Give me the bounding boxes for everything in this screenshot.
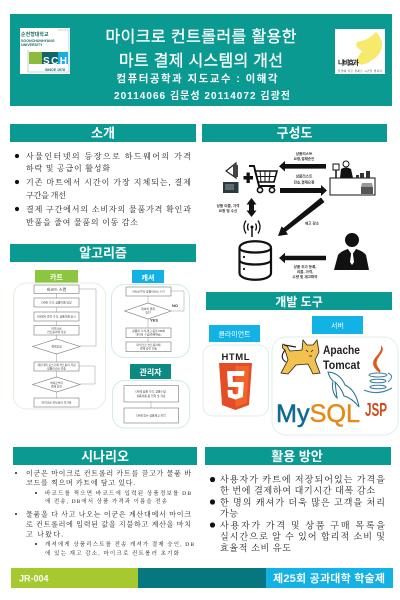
icon: wireless bbox=[244, 220, 260, 237]
cart flowchart: DB에 가격, 상품이름 요청 bbox=[41, 300, 72, 304]
header banner bbox=[10, 14, 392, 106]
cart flowchart: 캐셔로부터 bbox=[50, 381, 63, 385]
cashier flowchart: 상품의 가격,재고 등을 DB에 bbox=[132, 329, 165, 333]
server panel: 서버 bbox=[331, 321, 344, 330]
icon: HTML5: HTML bbox=[222, 352, 250, 363]
icon: java cup bbox=[364, 345, 392, 393]
label: stock decrease: 재고 감소 bbox=[305, 220, 320, 226]
section heading: intro: 소개 bbox=[91, 126, 115, 140]
label: manager input: 이름, 가격, bbox=[297, 269, 313, 274]
scenario text: 고 나왔다. bbox=[26, 530, 63, 538]
manager flowchart: DB에 있는 상품재고 파악 bbox=[136, 414, 166, 418]
section heading: algorithm: 알고리즘 bbox=[79, 246, 127, 260]
server panel bbox=[272, 316, 398, 435]
cashier flowchart: YES bbox=[150, 318, 158, 322]
scenario text: 에 있는 재고 감소, 마이크로 컨트롤러 초기화 bbox=[45, 549, 180, 557]
header banner: 마트 결제 시스템의 개선 bbox=[119, 52, 283, 70]
icon: cart sensors bbox=[223, 163, 238, 193]
cashier flowchart: 카트로부터 상품리스트 수신 bbox=[132, 290, 165, 294]
intro text bbox=[15, 151, 191, 227]
cashier flowchart: NO bbox=[172, 303, 178, 308]
butterfly logo: 한번에 작은 결제로 시간을 줄이다 bbox=[338, 69, 383, 73]
university logo: SOONCHUNHYANG bbox=[21, 39, 55, 43]
section heading: algorithm bbox=[10, 244, 196, 262]
cart flowchart: 계산대의 포스기에 컨트롤러 저장 bbox=[37, 363, 76, 367]
arrow: request list to cart bbox=[279, 161, 326, 172]
section heading: intro bbox=[10, 124, 196, 142]
arrow: cashier to database bbox=[278, 198, 324, 236]
label: manager input: 수량 및 재고파악 bbox=[292, 274, 318, 279]
icon: dolphin bbox=[328, 372, 359, 407]
cart flowchart: 상품리스트 전송 bbox=[47, 366, 66, 370]
cart flowchart: 카트 bbox=[50, 272, 63, 282]
intro text: 하락 및 공급이 활성화 bbox=[26, 163, 110, 173]
applications text: 한 명의 캐셔가 더욱 많은 고객을 처리 bbox=[220, 496, 385, 508]
section heading: architecture bbox=[202, 124, 387, 142]
university logo: 순천향대학교 bbox=[21, 31, 49, 38]
section heading: applications bbox=[205, 447, 391, 465]
header banner: 20114066 김문성 20114072 김광전 bbox=[114, 90, 290, 102]
section heading: scenario: 시나리오 bbox=[81, 449, 129, 464]
scenario text: 코드를 찍으며 카트에 담고 있다. bbox=[26, 478, 135, 487]
cart flowchart bbox=[14, 270, 106, 409]
butterfly logo: 나비효과 bbox=[338, 58, 360, 67]
icon: cashier bbox=[330, 161, 375, 195]
applications text bbox=[210, 474, 385, 553]
arrow: manager to database bbox=[279, 253, 326, 263]
text: Apache Tomcat: Apache bbox=[323, 345, 360, 357]
scenario text: 캐셔에게 상품리스트를 전송 캐셔가 결제 승인, DB bbox=[45, 540, 194, 548]
cashier flowchart: 데이터 수정(결제완료) bbox=[136, 332, 161, 336]
footer bar bbox=[11, 568, 393, 588]
text: MySQL: MySQL bbox=[276, 400, 360, 428]
manager flowchart: DB에 상품 가격, 상품수량, bbox=[136, 390, 167, 394]
client panel bbox=[203, 325, 268, 416]
manager flowchart: 관리자 bbox=[139, 367, 162, 377]
label: item query: 상품 이름, 가격 bbox=[217, 203, 239, 208]
cart flowchart: 결제요청 bbox=[51, 344, 62, 348]
cart flowchart: 마이크로 bbox=[51, 326, 62, 330]
header banner: 마이크로 컨트롤러를 활용한 bbox=[106, 28, 297, 46]
cart flowchart: 결제 승인 bbox=[51, 384, 62, 388]
manager flowchart bbox=[112, 364, 190, 428]
applications text: 사용자가 카트에 저장되어있는 가격을 bbox=[220, 474, 385, 484]
client panel: 클라이언트 bbox=[218, 330, 251, 338]
cashier flowchart: 승인 bbox=[145, 310, 151, 314]
university logo bbox=[20, 28, 70, 74]
label: list request bbox=[294, 151, 314, 161]
label: list transfer: 전송,결제요청 bbox=[294, 180, 314, 184]
header banner: 컴퓨터공학과 지도교수 : 이해각 bbox=[116, 72, 278, 85]
intro text: 기존 마트에서 시간이 가장 지체되는, 결제 bbox=[26, 177, 191, 187]
scenario text: 물품을 다 사고 나오는 이군은 계산대에서 마이크 bbox=[26, 510, 191, 518]
section heading: dev tools: 개발 도구 bbox=[275, 295, 323, 309]
intro text: 결제 구간에서의 소비자의 물품가격 확인과 bbox=[26, 204, 191, 214]
scenario text: 로 컨트롤러에 입력된 값을 지불하고 계산을 마치 bbox=[26, 520, 191, 528]
text: Apache Tomcat bbox=[323, 345, 360, 372]
manager flowchart: 상품이름 등 입력 및 저장 bbox=[137, 394, 166, 398]
architecture diagram bbox=[217, 151, 375, 280]
section heading: scenario bbox=[13, 447, 197, 465]
cashier flowchart bbox=[112, 270, 190, 358]
scenario text: 바코드를 찍으면 바코드에 입력된 상품정보를 DB bbox=[45, 489, 191, 497]
university logo: SCH bbox=[43, 56, 67, 67]
cashier flowchart: 캐셔 bbox=[142, 273, 154, 282]
icon: database bbox=[240, 241, 271, 280]
cashier flowchart: 결제 승인 전송 bbox=[140, 346, 157, 350]
cart flowchart: 컨트롤러에 저장 bbox=[47, 330, 66, 334]
intro text: 사물인터넷의 등장으로 하드웨어의 가격 bbox=[26, 151, 191, 161]
text: Apache Tomcat: Tomcat bbox=[323, 360, 360, 372]
intro text: 반품을 줄여 물품의 이동 감소 bbox=[26, 217, 138, 227]
section heading: applications: 활용 방안 bbox=[271, 449, 323, 464]
cart flowchart: 바코드 스캔 bbox=[47, 286, 67, 292]
label: list transfer bbox=[294, 174, 314, 184]
label: list transfer: 상품리스트 bbox=[296, 174, 313, 178]
arrow: cart to cashier bbox=[280, 185, 327, 196]
scenario text: 에 전송, DB에서 상품 가격과 이름을 전송 bbox=[45, 497, 168, 505]
university logo: SINCE 1978 bbox=[45, 68, 65, 72]
footer bar: JR-004 bbox=[19, 574, 49, 584]
cart flowchart: 마이크로 컨트롤러 초기화 bbox=[42, 400, 72, 404]
intro text: 구간을 개선 bbox=[26, 190, 66, 200]
icon: shopping cart bbox=[249, 166, 277, 193]
scenario text bbox=[15, 468, 194, 557]
label: item query: 요청 및 수신 bbox=[219, 208, 237, 213]
icon: tomcat bbox=[281, 340, 320, 374]
section heading: architecture: 구성도 bbox=[277, 126, 312, 140]
footer bar: 제25회 공과대학 학술제 bbox=[273, 571, 385, 585]
label: manager input bbox=[292, 264, 318, 279]
applications text: 효율적 소비 유도 bbox=[220, 542, 291, 553]
label: item query bbox=[217, 203, 239, 213]
applications text: 사용자가 가격 및 상품 구매 목록을 bbox=[220, 520, 385, 530]
label: manager input: 상품 추가 등록, bbox=[294, 264, 316, 269]
cart flowchart: DB에서 받아 가격, 상품이름 표시 bbox=[37, 314, 76, 318]
university logo: UNIVERSITY bbox=[21, 43, 43, 47]
icon: manager bbox=[334, 233, 369, 270]
cashier flowchart: 캐셔의 결제 bbox=[141, 307, 155, 311]
label: list request: 요청,결제승인 bbox=[294, 156, 314, 161]
applications text: 가능 bbox=[220, 508, 238, 518]
scenario text: 이군은 마이크로 컨트롤러 카트를 끌고가 물품 바 bbox=[26, 468, 191, 478]
section heading: dev tools bbox=[206, 292, 392, 310]
text: JSP: JSP bbox=[365, 400, 387, 420]
label: list request: 상품리스트 bbox=[296, 151, 313, 156]
icon: plus bbox=[244, 172, 253, 183]
cashier flowchart: 마이크로 컨트롤러에 bbox=[137, 343, 161, 347]
applications text: 실시간으로 알 수 있어 합리적 소비 및 bbox=[220, 530, 385, 542]
applications text: 한 번에 결제하여 대기시간 대폭 감소 bbox=[220, 484, 375, 496]
arrow: cart to database bbox=[246, 198, 256, 217]
butterfly logo bbox=[335, 29, 385, 74]
